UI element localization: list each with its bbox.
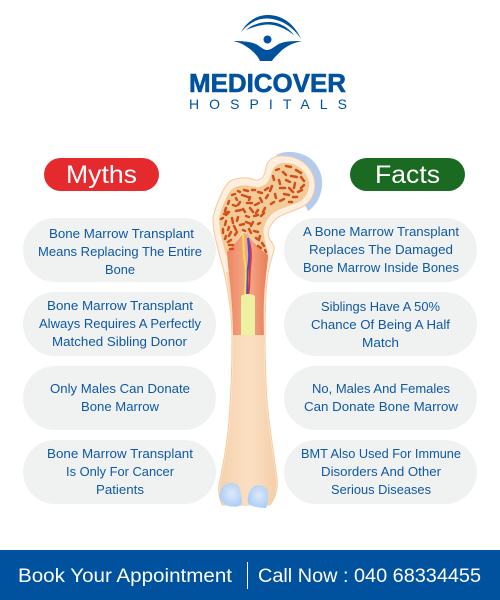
panel: fact 2: Chance Of Being A Half (311, 318, 451, 332)
vessel: blue (247, 238, 249, 295)
panel: myth 3 (23, 366, 216, 430)
panel: fact 4: Serious Diseases (331, 483, 431, 497)
panel: myth 2: Matched Sibling Donor (52, 335, 187, 349)
panel: myth 4: Bone Marrow Transplant (47, 447, 194, 461)
panel: fact 1: Replaces The Damaged (309, 243, 453, 257)
panel: fact 1: Bone Marrow Inside Bones (303, 261, 459, 275)
panel: fact 4: BMT Also Used For Immune (301, 447, 461, 461)
logo: Medicover Hospitals (189, 15, 347, 112)
marrow spots (221, 166, 304, 252)
panel: myth 1: Bone (105, 263, 135, 277)
panel: myth 4: Patients (96, 483, 144, 497)
panel: fact 2: Siblings Have A 50% (321, 300, 440, 314)
panel: myth 2: Always Requires A Perfectly (39, 317, 202, 331)
panel: fact 4: Disorders And Other (321, 465, 441, 479)
panel: myth 1: Means Replacing The Entire (38, 245, 202, 259)
right condyle (248, 485, 268, 508)
panel: fact 2: Match (362, 336, 399, 350)
heading: Myths (44, 158, 159, 191)
panel: myth 2 (23, 292, 216, 356)
vessel: yellow (243, 234, 246, 295)
logo wordmark: MEDICOVER (189, 70, 346, 98)
heading: Facts: Facts (375, 161, 440, 189)
panel: fact 1 (284, 218, 477, 282)
marrow cavity (227, 233, 268, 335)
panel: myth 3: Only Males Can Donate (50, 382, 190, 396)
panel: myth 4: Is Only For Cancer (66, 465, 174, 479)
footer: book appointment: Book Your Appointment (18, 566, 233, 587)
panel: fact 4 (284, 440, 477, 504)
logo subtitle: HOSPITALS (189, 96, 347, 112)
heading: Facts (350, 158, 465, 191)
yellow marrow rod (241, 294, 255, 335)
heading: Myths: Myths (66, 161, 137, 189)
panel: myth 4 (23, 440, 216, 504)
panel: myth 1 (23, 218, 216, 282)
panel: myth 1: Bone Marrow Transplant (49, 227, 195, 241)
cartilage cap on bone head (276, 152, 322, 211)
panel: fact 3: No, Males And Females (312, 382, 450, 396)
panel: myth 3: Bone Marrow (81, 400, 160, 414)
bone outer shape (213, 156, 315, 505)
left condyle (220, 483, 242, 507)
spongy bone head (219, 163, 309, 256)
panel: fact 3: Can Donate Bone Marrow (304, 400, 459, 414)
panel: fact 1: A Bone Marrow Transplant (303, 225, 460, 239)
shaft shading (220, 272, 276, 505)
panel: fact 3 (284, 366, 477, 430)
footer: phone number: Call Now : 040 68334455 (258, 566, 481, 587)
icon: logo figure with arcs (233, 15, 302, 61)
footer bar (0, 550, 500, 600)
vessel: red (248, 238, 251, 295)
illustration: femur bone (213, 152, 322, 508)
panel: myth 2: Bone Marrow Transplant (47, 299, 194, 313)
panel: fact 2 (284, 292, 477, 356)
